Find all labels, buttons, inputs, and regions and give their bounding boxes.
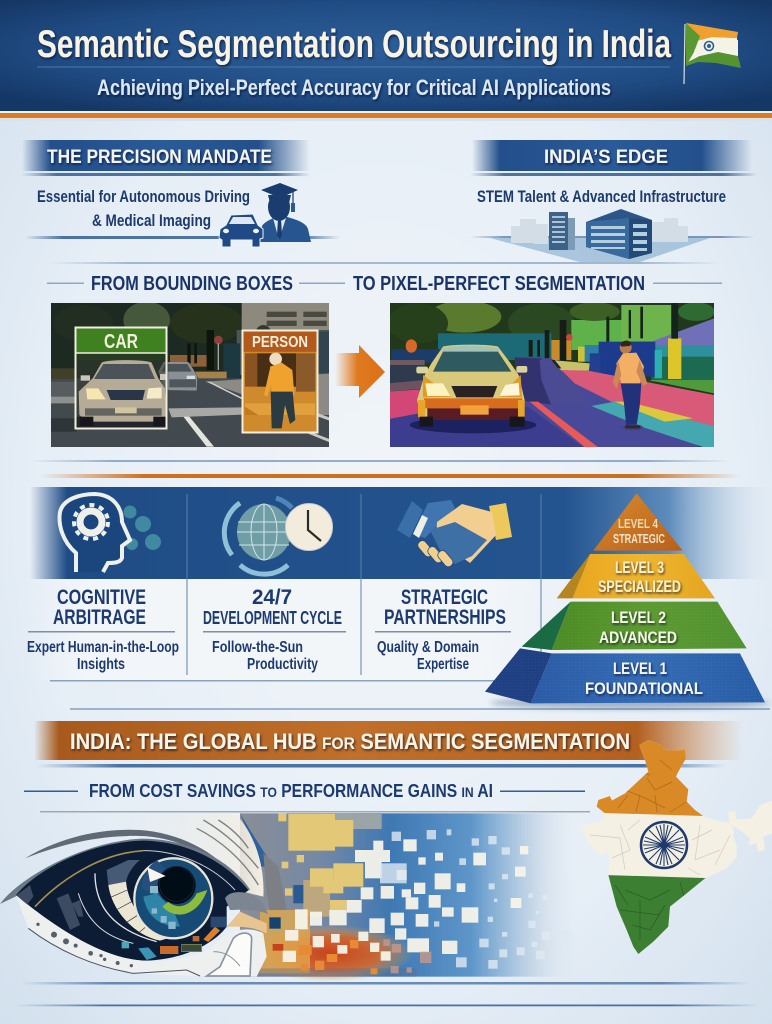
banner: India the global hub: INDIA: THE GLOBAL HUB FOR SEMANTIC SEGMENTATION	[70, 729, 630, 754]
column: cognitive arbitrage: Insights	[77, 656, 125, 673]
column: 24/7 development cycle: DEVELOPMENT CYCLE	[203, 608, 342, 628]
level 4: STRATEGIC	[613, 531, 665, 546]
image: street scene with bounding boxes	[50, 300, 333, 450]
section heading: from bounding boxes to pixel-perfect segmentation: FROM BOUNDING BOXES	[91, 273, 293, 295]
column: strategic partnerships: PARTNERSHIPS	[384, 606, 506, 629]
column: strategic partnerships: Quality & Domain	[377, 639, 479, 656]
level 4	[593, 493, 683, 551]
text block: Essential for Autonomous Driving	[37, 187, 250, 206]
icon: graduate	[259, 183, 311, 242]
column: strategic partnerships	[375, 500, 512, 673]
section heading: from bounding boxes to pixel-perfect segmentation	[47, 273, 722, 295]
person bounding box	[242, 330, 318, 432]
arrow	[335, 345, 385, 398]
column: 24/7 development cycle: 24/7	[252, 586, 292, 609]
car bounding box: CAR	[104, 331, 138, 353]
level 3: SPECIALIZED	[598, 577, 681, 596]
header band	[0, 0, 772, 121]
column: 24/7 development cycle: Follow-the-Sun	[212, 639, 303, 656]
heading badge: THE PRECISION MANDATE	[47, 147, 272, 168]
illustration: stylised eye	[0, 813, 268, 977]
subtitle: Achieving Pixel-Perfect Accuracy for Critical AI Applications	[97, 75, 611, 100]
level 1: LEVEL 1	[613, 659, 667, 678]
level 2: LEVEL 2	[611, 608, 666, 627]
level 3: LEVEL 3	[615, 558, 664, 577]
chart: maturity pyramid	[485, 493, 770, 709]
icon: car	[219, 214, 263, 247]
column: strategic partnerships: Expertise	[417, 656, 469, 673]
map: India in tricolour	[580, 740, 772, 954]
level 2: ADVANCED	[599, 628, 677, 647]
icon: globe and clock	[224, 498, 332, 574]
image: segmented street scene	[388, 300, 718, 450]
illustration: pixels dissolving	[240, 813, 580, 982]
column: 24/7 development cycle	[203, 498, 346, 673]
column: cognitive arbitrage: ARBITRAGE	[53, 606, 146, 629]
column: cognitive arbitrage: COGNITIVE	[57, 586, 146, 609]
column: cognitive arbitrage: Expert Human-in-the-Loop	[27, 639, 179, 656]
subheading: from cost savings to performance gains: FROM COST SAVINGS TO PERFORMANCE GAINS IN AI	[89, 781, 493, 801]
panel: the precision mandate	[22, 140, 340, 247]
icon: handshake	[397, 500, 512, 568]
section heading: from bounding boxes to pixel-perfect segmentation: TO PIXEL-PERFECT SEGMENTATION	[353, 273, 645, 295]
car bounding box	[75, 328, 168, 429]
heading badge	[22, 140, 310, 171]
icon: head with gear	[60, 494, 161, 572]
level 3	[557, 554, 715, 598]
text block	[37, 187, 250, 230]
heading badge: INDIA’S EDGE	[544, 147, 668, 168]
segmented car	[410, 345, 536, 433]
panel: India's edge	[470, 140, 757, 262]
person bounding box: PERSON	[252, 334, 308, 351]
icon: buildings	[490, 209, 710, 262]
panel: capabilities	[27, 487, 772, 682]
column: strategic partnerships: STRATEGIC	[401, 586, 488, 609]
second car	[158, 362, 197, 391]
level 1	[485, 648, 765, 703]
icon: India flag	[684, 23, 741, 84]
level 2	[522, 602, 747, 650]
banner: India the global hub	[34, 721, 744, 760]
level 4: LEVEL 4	[618, 516, 659, 531]
column: cognitive arbitrage	[27, 494, 179, 673]
column: 24/7 development cycle: Productivity	[247, 656, 318, 673]
heading badge	[472, 140, 752, 171]
chakra	[641, 822, 687, 868]
segmented person	[613, 341, 647, 430]
level 1: FOUNDATIONAL	[585, 679, 703, 698]
text block: & Medical Imaging	[92, 211, 211, 230]
